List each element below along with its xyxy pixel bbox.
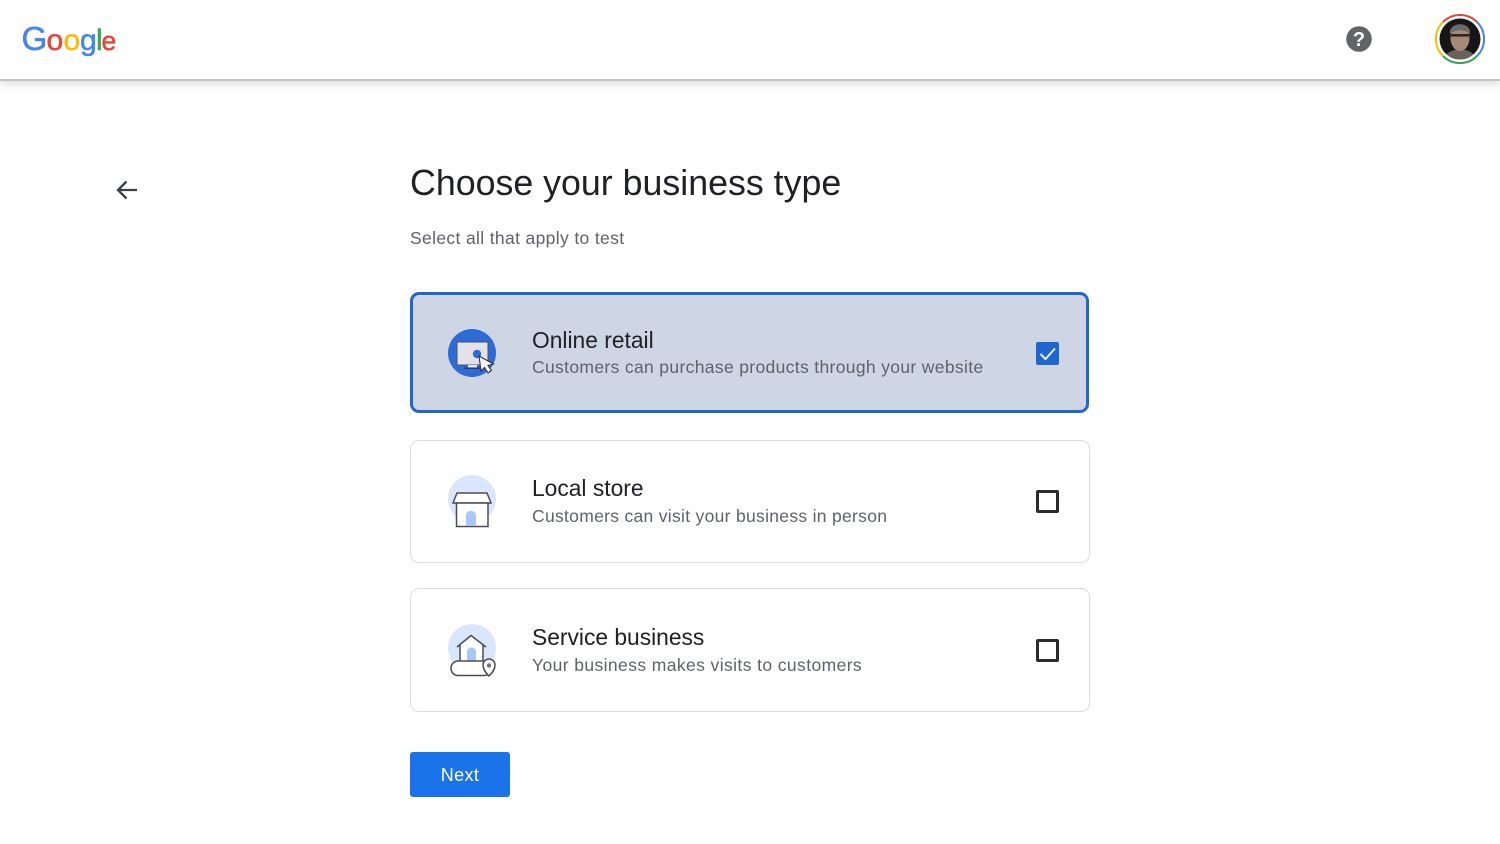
- logo: Google: l: [96, 24, 103, 57]
- icon: local store: [448, 475, 496, 528]
- button: next: Next: [441, 765, 479, 785]
- logo: Google: g: [80, 24, 97, 57]
- icon: online retail: [448, 329, 496, 377]
- description: local store: Customers can visit your business in person: [532, 506, 887, 526]
- title: Choose your business type: [410, 163, 841, 203]
- label: online retail: Online retail: [532, 327, 654, 353]
- logo: Google: G: [22, 20, 47, 57]
- logo: Google: o: [64, 24, 80, 57]
- checkbox: unchecked service business: [1036, 639, 1059, 662]
- button: next: [410, 752, 510, 797]
- panel: local store: [410, 440, 1090, 563]
- logo: Google: o: [46, 24, 63, 57]
- icon: service business: [448, 624, 496, 677]
- panel: online retail: [410, 292, 1089, 413]
- logo: Google: [22, 20, 116, 57]
- label: local store: Local store: [532, 475, 644, 501]
- avatar with coloured ring: [1434, 14, 1486, 64]
- checkbox: checked: [1036, 342, 1059, 365]
- panel: service business: [410, 588, 1090, 712]
- label: service business: Service business: [532, 624, 704, 650]
- icon: help: [1346, 26, 1372, 52]
- icon: help: ?: [1353, 29, 1365, 51]
- description: service business: Your business makes visits to customers: [532, 655, 862, 675]
- arrow: back: [116, 180, 137, 200]
- checkbox: unchecked local store: [1036, 490, 1059, 513]
- header bar: [0, 0, 1500, 81]
- logo: Google: e: [102, 26, 116, 56]
- description: online retail: Customers can purchase products through your website: [532, 357, 984, 377]
- subtitle: Select all that apply to test: [410, 228, 624, 248]
